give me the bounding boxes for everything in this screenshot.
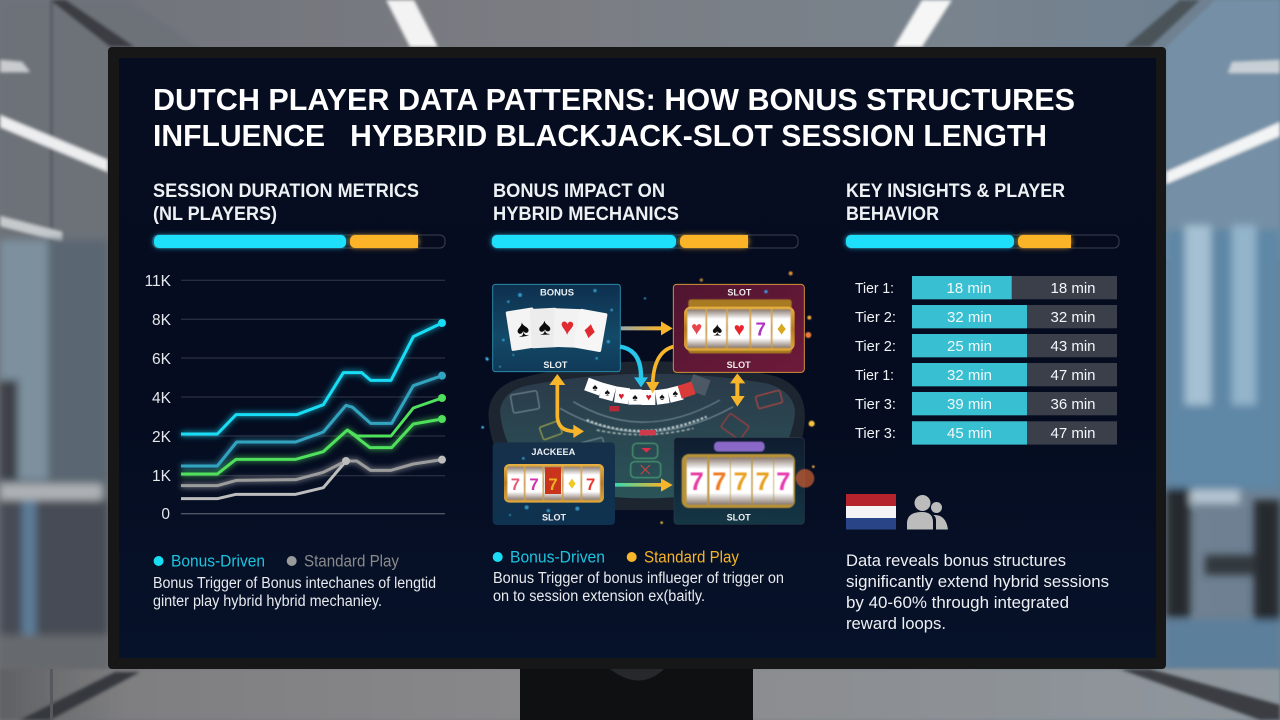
panel: slot reel top right: ♥ xyxy=(691,318,702,339)
legend 1: Standard Play xyxy=(304,552,400,570)
arrow: bonus to slot xyxy=(621,321,673,335)
panel: slot reel bottom right: 7 xyxy=(756,468,770,496)
tier duration table: 36 min xyxy=(1050,396,1096,413)
panel: slot reel bottom right: 7 xyxy=(734,468,748,496)
dealt card fan: ♥ xyxy=(618,391,624,402)
axis labels: 1K xyxy=(152,468,172,485)
heading: session duration metrics: SESSION DURATION METRICS xyxy=(153,181,419,202)
tier duration table: 39 min xyxy=(947,396,992,413)
panel: slot reel top right: 7 xyxy=(755,318,766,339)
column 1: session duration metrics xyxy=(145,181,446,610)
panel: jackpot reel: JACKEEA xyxy=(531,447,576,457)
tier duration table: 43 min xyxy=(1050,338,1096,355)
heading: session duration metrics xyxy=(153,181,419,225)
title: DUTCH PLAYER DATA PATTERNS: HOW BONUS STRUCTURES xyxy=(153,82,1075,117)
ambient sparkles xyxy=(481,271,815,524)
tier duration table: 47 min xyxy=(1050,425,1096,442)
dealt card fan: ♠ xyxy=(605,387,611,398)
axis labels xyxy=(145,273,172,523)
dealt card fan: ♠ xyxy=(592,383,598,394)
progress bar 3 xyxy=(846,235,1119,248)
tier duration table: 32 min xyxy=(947,367,992,384)
panel: slot reel bottom right: 7 xyxy=(690,468,704,496)
panel: slot reel top right: SLOT xyxy=(727,288,752,298)
arrow: jackpot to slot xyxy=(615,478,673,492)
axis labels: 4K xyxy=(152,390,172,407)
legend 2: Standard Play xyxy=(644,548,740,566)
legend 1: Bonus-Driven xyxy=(171,552,265,570)
arrow: slot to table two-way xyxy=(730,373,745,407)
caption 1 xyxy=(153,575,436,610)
screen panel xyxy=(119,58,1156,658)
panel: slot reel bottom right: SLOT xyxy=(727,512,751,522)
panel: bonus cards xyxy=(485,284,620,372)
heading: key insights: BEHAVIOR xyxy=(846,204,939,225)
bonus panel sparkles xyxy=(485,289,613,368)
monitor bezel xyxy=(108,47,1166,669)
arrow: bonus to table xyxy=(620,347,648,387)
heading: bonus impact xyxy=(493,181,679,225)
playing cards: ♠ xyxy=(538,313,552,340)
axis labels: 6K xyxy=(152,351,172,368)
tier duration table: Tier 3: xyxy=(855,396,896,413)
tier duration table: 18 min xyxy=(1050,280,1096,297)
heading: key insights xyxy=(846,181,1065,225)
tier duration table: Tier 1: xyxy=(855,280,894,297)
data series xyxy=(181,319,446,499)
caption 1: Bonus Trigger of Bonus intechanes of lengtid xyxy=(153,575,436,592)
heading: key insights: KEY INSIGHTS & PLAYER xyxy=(846,181,1065,202)
panel: slot reel top right: ♦ xyxy=(777,318,786,339)
hybrid mechanics diagram xyxy=(481,271,815,525)
legend 2 xyxy=(493,548,740,566)
tier duration table: 32 min xyxy=(947,309,992,326)
dealt card fan: ♠ xyxy=(659,392,665,403)
insight text: by 40-60% through integrated xyxy=(846,593,1069,612)
column 3: key insights xyxy=(846,181,1119,633)
insight text xyxy=(846,551,1109,633)
panel: jackpot reel: 7 xyxy=(586,475,595,494)
panel: jackpot reel: SLOT xyxy=(542,512,566,522)
tier duration table: Tier 1: xyxy=(855,367,894,384)
progress bar 1 xyxy=(153,235,445,248)
arrow: slot to table xyxy=(646,347,673,393)
playing cards: ♦ xyxy=(582,316,598,344)
dealt card fan: ♠ xyxy=(673,389,679,400)
panel: bonus cards: SLOT xyxy=(543,360,568,370)
dealt card fan xyxy=(584,374,711,405)
playing cards: ♠ xyxy=(515,315,531,342)
tier duration table xyxy=(855,276,1117,445)
legend 2: Bonus-Driven xyxy=(510,548,605,566)
dealt card fan: ♥ xyxy=(646,393,652,404)
title xyxy=(153,82,1075,153)
axis labels: 2K xyxy=(152,429,172,446)
column 2: bonus impact xyxy=(481,181,815,605)
heading: bonus impact: BONUS IMPACT ON xyxy=(493,181,665,202)
tier duration table: Tier 2: xyxy=(855,309,896,326)
legend 1 xyxy=(154,552,400,570)
progress bar 2 xyxy=(492,235,798,248)
panel: slot reel top right: ♥ xyxy=(734,318,745,339)
dealt card fan: ♠ xyxy=(632,393,638,404)
panel: slot reel top right: SLOT xyxy=(727,360,751,370)
panel: slot reel bottom right: 7 xyxy=(776,468,790,496)
panel: bonus cards: BONUS xyxy=(540,288,574,298)
axis labels: 11K xyxy=(145,273,172,290)
panel: jackpot reel: 7 xyxy=(511,475,520,494)
tier duration table: 45 min xyxy=(947,425,992,442)
insight text: reward loops. xyxy=(846,614,946,633)
panel: jackpot reel: 7 xyxy=(529,475,539,494)
panel: slot reel top right: ♠ xyxy=(712,318,722,339)
heading: bonus impact: HYBRID MECHANICS xyxy=(493,204,679,225)
caption 2: Bonus Trigger of bonus influeger of trigger on xyxy=(493,570,784,587)
playing cards: ♥ xyxy=(560,313,575,340)
icon: Netherlands flag xyxy=(846,494,896,530)
panel: jackpot reel xyxy=(493,442,615,525)
axis labels: 8K xyxy=(152,312,172,329)
caption 2 xyxy=(493,570,784,605)
playing cards xyxy=(506,307,608,352)
tier duration table: 32 min xyxy=(1050,309,1096,326)
tier duration table: 47 min xyxy=(1050,367,1096,384)
caption 2: on to session extension ex(baitly. xyxy=(493,588,705,605)
insight text: significantly extend hybrid sessions xyxy=(846,572,1109,591)
icon: players xyxy=(907,495,948,530)
tier duration table: 18 min xyxy=(946,280,992,297)
tier duration table: Tier 3: xyxy=(855,425,896,442)
heading: session duration metrics: (NL PLAYERS) xyxy=(153,204,277,225)
tier duration table: 25 min xyxy=(947,338,992,355)
blackjack table xyxy=(488,361,805,510)
caption 1: ginter play hybrid hybrid mechaniey. xyxy=(153,593,382,610)
insight text: Data reveals bonus structures xyxy=(846,551,1066,570)
title: INFLUENCE HYBBRID BLACKJACK-SLOT SESSION LENGTH xyxy=(153,118,1047,153)
panel: jackpot reel: 7 xyxy=(548,475,558,494)
panel: slot reel top right xyxy=(673,284,804,372)
monitor stand xyxy=(520,665,753,720)
line chart xyxy=(145,273,446,523)
axis labels: 0 xyxy=(161,506,170,523)
panel: jackpot reel: ♦ xyxy=(568,474,576,493)
tier duration table: Tier 2: xyxy=(855,338,896,355)
panel: slot reel bottom right: 7 xyxy=(712,468,726,496)
arrow: bonus to jackpot xyxy=(549,374,584,438)
panel: slot reel bottom right xyxy=(674,438,814,524)
